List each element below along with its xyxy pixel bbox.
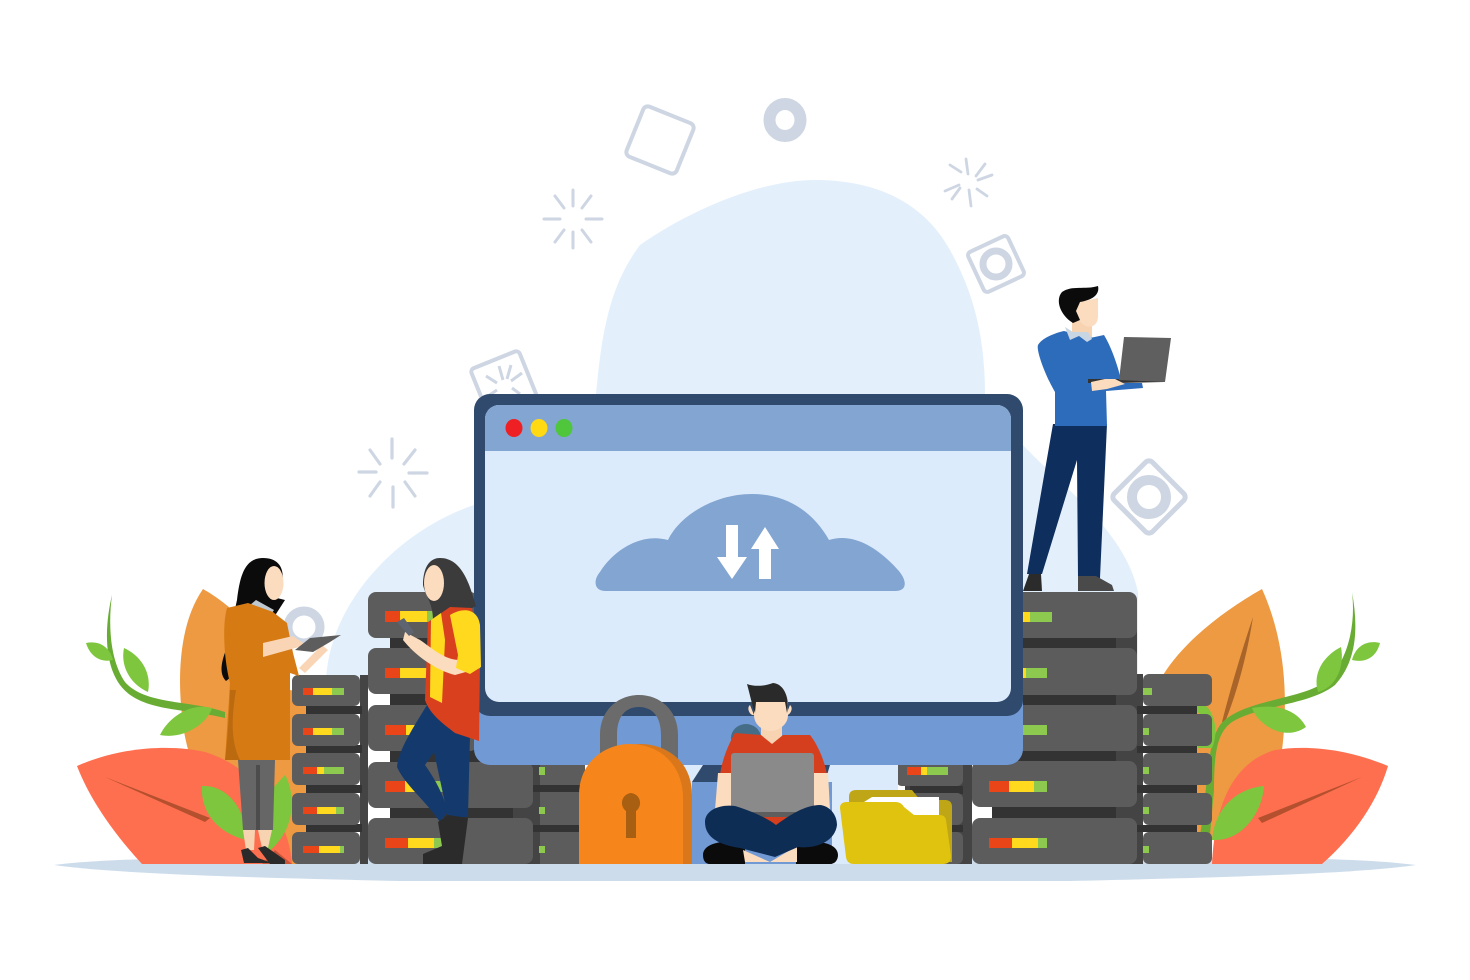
- lock body: [579, 744, 683, 864]
- sweater: [1038, 331, 1143, 426]
- shoes: [703, 842, 838, 864]
- crossed legs: [705, 805, 837, 857]
- hair: [1059, 286, 1098, 323]
- arms: [715, 773, 830, 810]
- shirt below laptop: [740, 810, 808, 826]
- woman with phone: [397, 558, 481, 864]
- red leaf left: [77, 748, 292, 864]
- trousers: [1027, 424, 1107, 578]
- monitor chin: [474, 660, 1023, 765]
- vest: [425, 607, 480, 741]
- keyhole: [622, 793, 640, 838]
- right plants: [1163, 589, 1388, 864]
- padlock: [579, 695, 692, 864]
- monitor stand light backdrop: [683, 760, 898, 864]
- shackle: [600, 695, 678, 780]
- hair: [747, 683, 788, 713]
- heels: [241, 846, 285, 864]
- screen: [485, 405, 1011, 702]
- download arrow: [717, 525, 747, 579]
- collar: [250, 600, 274, 614]
- decorative icon: square outline: [625, 105, 695, 175]
- vine leaves left: [86, 642, 113, 661]
- sleeve: [450, 610, 481, 674]
- upload arrow: [751, 527, 779, 579]
- monitor frame: [474, 394, 1023, 716]
- laptop keyboard: [1088, 379, 1164, 383]
- arm and hands: [263, 636, 328, 673]
- title bar: [485, 405, 1011, 451]
- folder: [840, 790, 952, 864]
- hair: [222, 558, 285, 681]
- decorative icon: tilted square with ring: [967, 235, 1025, 293]
- decorative icon: burst lower left: [359, 439, 427, 507]
- orange leaf left: [180, 589, 312, 864]
- decorative icon: diamond with ring: [1111, 459, 1187, 535]
- neck: [761, 720, 782, 745]
- orange leaf right: [1163, 589, 1285, 840]
- server stack: large left: [368, 592, 533, 864]
- ears: [748, 705, 792, 715]
- dress: [224, 603, 299, 760]
- server stack: behind lock: [533, 760, 585, 864]
- server stack: large right: [972, 592, 1137, 864]
- standing man with laptop: [1023, 286, 1171, 591]
- trousers: [238, 760, 275, 830]
- arm: [403, 632, 480, 675]
- hand: [1091, 379, 1125, 391]
- decorative icon: burst left: [544, 190, 602, 248]
- shirt: [720, 733, 827, 778]
- sitting man with laptop: [703, 683, 838, 864]
- vine side branch right: [1197, 706, 1215, 748]
- collar: [1065, 327, 1092, 342]
- backpack: [731, 724, 761, 752]
- cloud icon: [596, 494, 905, 591]
- jeans: [397, 700, 470, 822]
- decorative icon: ring behind woman: [288, 611, 320, 643]
- face: [754, 697, 788, 731]
- vine right: [1200, 592, 1355, 835]
- decorative icon: tilted square with burst: [470, 350, 538, 418]
- window button yellow: [530, 419, 548, 437]
- neck: [1072, 318, 1092, 338]
- server stack: small behind folder: [896, 753, 972, 864]
- vine left: [107, 595, 225, 718]
- hair: [423, 558, 476, 620]
- ground shadow: [54, 857, 1416, 881]
- phone: [397, 618, 414, 636]
- shoe: [423, 815, 468, 864]
- decorative icon: ring top: [770, 104, 800, 136]
- lock body back: [592, 744, 692, 864]
- left shoe: [1023, 574, 1042, 591]
- server stack: small right: [1137, 674, 1212, 864]
- monitor stand: [692, 782, 832, 864]
- red leaf right: [1212, 748, 1388, 864]
- feet: [743, 846, 797, 862]
- tablet: [295, 635, 341, 652]
- background blob: [326, 180, 1138, 680]
- window button red: [506, 419, 522, 437]
- face: [1075, 298, 1098, 327]
- face: [264, 566, 284, 600]
- monitor: [474, 394, 1023, 864]
- laptop: [731, 753, 814, 812]
- decorative icon: burst right: [945, 159, 992, 206]
- woman with tablet: [222, 558, 341, 864]
- server stack: small left: [292, 675, 368, 864]
- window button green: [556, 419, 572, 437]
- laptop screen: [1119, 337, 1171, 382]
- face: [424, 565, 444, 601]
- legs: [243, 830, 272, 850]
- shirt: [430, 613, 445, 703]
- left plants: [77, 589, 312, 864]
- vine leaves right: [1352, 642, 1380, 661]
- right shoe: [1078, 576, 1114, 591]
